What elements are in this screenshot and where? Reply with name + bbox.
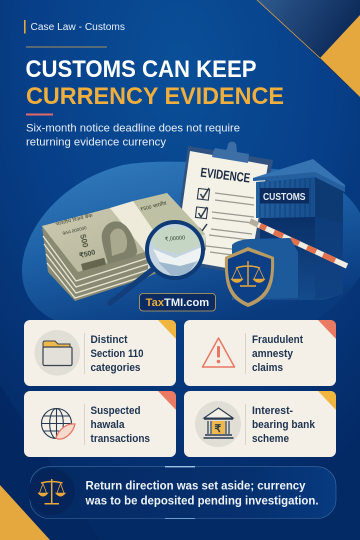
subtitle — [26, 123, 240, 149]
magnifying glass: ₹,00000 — [165, 234, 185, 243]
card: fraudulent amnesty: Fraudulent — [252, 334, 303, 346]
card: suspected hawala: Suspected — [90, 405, 140, 417]
card: suspected hawala — [24, 391, 176, 457]
title: CUSTOMS CAN KEEP — [26, 56, 256, 83]
barrier — [250, 221, 347, 266]
currency stack: ₹500 भारतीय — [140, 200, 167, 213]
portrait — [102, 221, 137, 264]
currency stack — [42, 193, 206, 301]
TaxTMI badge: TaxTMI.com — [146, 297, 209, 309]
top-right corner decoration — [257, 0, 360, 97]
category tag: Case Law - Customs — [30, 22, 125, 33]
subtitle: Six-month notice deadline does not require — [26, 123, 240, 135]
card: distinct section 110: Section 110 — [90, 348, 144, 360]
red accent line — [26, 114, 53, 116]
shield — [225, 247, 274, 307]
title: CURRENCY EVIDENCE — [26, 83, 284, 110]
title — [26, 56, 284, 110]
icon: scales of justice — [28, 468, 75, 515]
card: suspected hawala: hawala — [90, 419, 125, 431]
subtitle: returning evidence currency — [26, 137, 166, 149]
conclusion bar: was to be deposited pending investigation. — [85, 493, 318, 507]
clipboard evidence — [172, 142, 273, 276]
small box behind shield — [232, 238, 298, 300]
magnifying glass — [110, 222, 203, 303]
card: fraudulent amnesty: claims — [252, 362, 283, 374]
card: fraudulent amnesty — [184, 320, 336, 386]
card: interest-bearing bank: bearing bank — [252, 419, 316, 431]
currency stack: भारतीय रिज़र्व बैंक — [55, 212, 94, 228]
hero blob — [22, 162, 360, 322]
card: interest-bearing bank: ₹ — [214, 423, 222, 435]
TaxTMI badge — [140, 294, 216, 311]
customs booth — [253, 159, 345, 300]
customs booth: CUSTOMS — [263, 191, 306, 203]
currency stack: 500 — [78, 233, 90, 249]
conclusion bar — [28, 466, 336, 519]
bottom-left gold corner — [0, 485, 50, 540]
hero illustration — [42, 142, 347, 307]
card: interest-bearing bank: Interest- — [252, 405, 293, 417]
clipboard evidence: EVIDENCE — [200, 165, 251, 186]
currency stack: 9AA 000000 — [62, 225, 88, 236]
card: distinct section 110: Distinct — [90, 334, 128, 346]
card: interest-bearing bank — [184, 391, 336, 457]
card: fraudulent amnesty: amnesty — [252, 348, 293, 360]
conclusion bar: Return direction was set aside; currency — [86, 478, 306, 492]
card: distinct section 110 — [24, 320, 176, 386]
card: suspected hawala: transactions — [90, 433, 150, 445]
currency stack: ₹500 — [79, 248, 96, 260]
card: distinct section 110: categories — [90, 362, 140, 374]
card: interest-bearing bank: scheme — [252, 433, 289, 445]
gold divider — [26, 46, 107, 48]
